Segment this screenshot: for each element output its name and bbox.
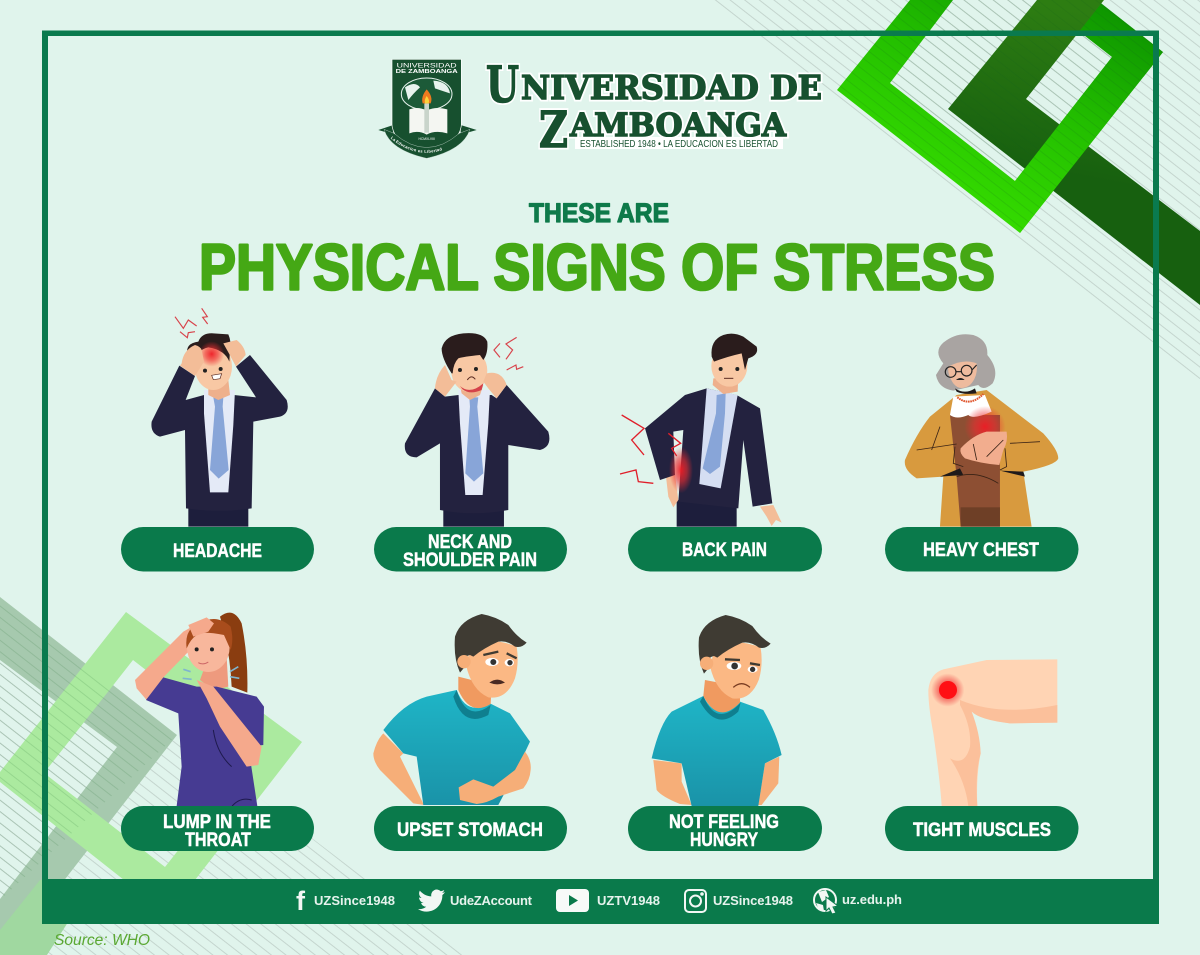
- label: not feeling hungry: NOT FEELING: [669, 811, 779, 833]
- logo: university wordmark: U: [486, 55, 519, 114]
- decoration: top right stripes and diamonds: [709, 0, 1200, 383]
- logo: university shield: La Educacion es Libertad: [390, 136, 442, 153]
- logo: university shield: [378, 59, 476, 159]
- logo: university wordmark: ESTABLISHED 1948 • LA EDUCACION ES LIBERTAD: [580, 138, 778, 150]
- logo: university wordmark: U: [486, 55, 519, 114]
- label: tight muscles: TIGHT MUSCLES: [913, 819, 1051, 841]
- logo: university shield: UNIVERSIDAD: [397, 62, 457, 69]
- footer bar: UZSince1948: [713, 893, 793, 908]
- footer bar: [42, 879, 1159, 924]
- icon: instagram: [685, 890, 706, 912]
- footer bar: UZSince1948: [314, 893, 395, 908]
- heading: these are: THESE ARE: [529, 198, 669, 228]
- label: neck and shoulder pain: NECK AND: [428, 531, 512, 553]
- logo: university shield: HCMXLVIII: [418, 137, 435, 141]
- logo: university wordmark: Z: [539, 100, 568, 159]
- label: headache: [121, 527, 314, 572]
- footer bar: UZTV1948: [597, 893, 660, 908]
- figure: lump in the throat: [135, 613, 264, 807]
- label: upset stomach: UPSET STOMACH: [397, 819, 543, 841]
- figure: neck and shoulder pain: [405, 333, 549, 527]
- icon: twitter: [418, 890, 445, 912]
- footer bar: UdeZAccount: [450, 893, 533, 908]
- logo: university wordmark: AMBOANGA: [569, 106, 787, 144]
- logo: university shield: DE ZAMBOANGA: [396, 69, 458, 75]
- title: PHYSICAL SIGNS OF STRESS: [199, 230, 995, 304]
- figure: tight muscles: [928, 659, 1057, 806]
- icon: globe cursor: [814, 889, 838, 914]
- icon: facebook: f: [296, 886, 306, 916]
- figure: back pain: [620, 334, 782, 527]
- label: headache: HEADACHE: [173, 540, 262, 562]
- figure: heavy chest: [905, 334, 1058, 527]
- label: lump in the throat: LUMP IN THE: [163, 811, 271, 833]
- label: tight muscles: [885, 806, 1078, 851]
- label: back pain: [628, 527, 822, 572]
- label: lump in the throat: [121, 806, 314, 851]
- decoration: bottom left stripes and diamonds: [0, 597, 465, 955]
- logo: university wordmark: Z: [539, 100, 568, 159]
- footer bar: uz.edu.ph: [842, 892, 902, 907]
- source note: Source: WHO: [54, 932, 150, 949]
- logo: university wordmark: NIVERSIDAD DE: [521, 68, 822, 107]
- icon: youtube: [556, 889, 589, 912]
- logo: university wordmark: [486, 55, 822, 159]
- label: neck and shoulder pain: [374, 527, 567, 572]
- figure: not feeling hungry: [652, 615, 782, 806]
- label: lump in the throat: THROAT: [185, 829, 251, 851]
- label: neck and shoulder pain: SHOULDER PAIN: [403, 549, 537, 571]
- logo: university wordmark: NIVERSIDAD DE: [521, 68, 822, 107]
- label: heavy chest: HEAVY CHEST: [923, 539, 1039, 561]
- label: not feeling hungry: HUNGRY: [690, 829, 758, 851]
- logo: university wordmark: AMBOANGA: [569, 106, 787, 144]
- label: not feeling hungry: [628, 806, 822, 851]
- label: back pain: BACK PAIN: [682, 539, 767, 561]
- label: heavy chest: [885, 527, 1078, 572]
- label: upset stomach: [374, 806, 567, 851]
- figure: upset stomach: [373, 614, 531, 805]
- figure: headache: [151, 308, 288, 527]
